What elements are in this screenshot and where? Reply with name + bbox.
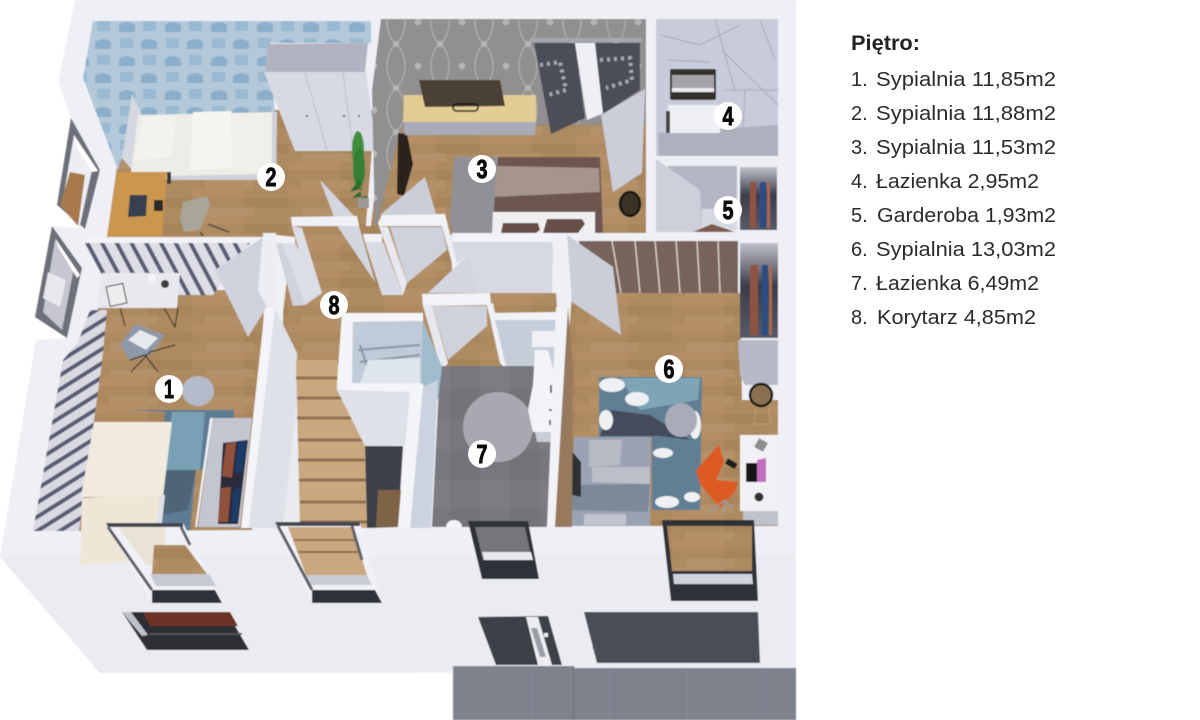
shower base — [360, 358, 420, 383]
room 2 wallpaper — [83, 21, 371, 170]
paved ground — [453, 666, 796, 720]
divider wall — [547, 307, 568, 527]
door leaf C — [390, 227, 447, 283]
stair flight — [296, 360, 367, 528]
badge 5 — [714, 195, 742, 225]
legend item 6: Sypialnia 13,03m2 — [876, 239, 1056, 261]
room 4: bathroom — [656, 19, 778, 156]
frame E top — [422, 293, 491, 306]
jamb C left — [379, 226, 407, 295]
towel radiator — [446, 520, 462, 527]
legend item 7: Łazienka 6,49m2 — [876, 273, 1039, 295]
shelf — [702, 209, 737, 230]
desk — [740, 435, 778, 525]
legend — [851, 32, 1056, 329]
plan drawing — [0, 0, 796, 720]
badge 4: 4 — [722, 101, 734, 131]
legend item 1: Sypialnia 11,85m2 — [876, 69, 1056, 91]
bathroom floor — [658, 125, 778, 156]
room 1 back wall stripes — [84, 243, 250, 295]
room 3 wallpaper — [372, 19, 646, 232]
rug — [130, 410, 234, 535]
chair — [180, 196, 229, 236]
shower front wall top — [337, 383, 423, 392]
rug — [449, 157, 500, 233]
left pillar — [258, 233, 276, 309]
badge 2: 2 — [266, 162, 276, 192]
legend item 3: 3. — [851, 137, 868, 159]
stairs and hall wall — [241, 308, 403, 528]
front door — [478, 616, 562, 665]
rug — [599, 377, 702, 510]
shower glass — [421, 321, 442, 400]
wall D face — [452, 242, 553, 293]
jamb E right — [487, 303, 507, 370]
front window 3 — [468, 521, 539, 579]
legend item 1: 1. — [851, 69, 868, 91]
badge 8: 8 — [328, 290, 340, 320]
door — [601, 89, 645, 192]
badge 1 — [155, 374, 183, 404]
shower top frame — [337, 313, 423, 383]
badge 5: 5 — [722, 195, 734, 225]
room 6 wall side — [555, 307, 573, 527]
closet rack — [740, 243, 778, 338]
wall panels — [612, 241, 720, 293]
shower marble interior — [352, 321, 423, 383]
room 1 floor — [72, 290, 265, 531]
TV stand — [403, 95, 536, 135]
room 5: wardrobe room — [656, 158, 778, 233]
door — [567, 235, 621, 335]
legend item 2: Sypialnia 11,88m2 — [876, 103, 1056, 125]
bed — [568, 437, 651, 526]
room 6 back wall — [578, 241, 738, 293]
left jamb inner — [282, 243, 322, 305]
left door leaf — [215, 237, 267, 337]
landing wood — [376, 490, 401, 527]
badge 1: 1 — [164, 374, 174, 404]
wall B face — [365, 242, 403, 295]
badge 6: 6 — [664, 354, 674, 384]
room 1 side window — [35, 226, 82, 338]
marble wall — [656, 19, 778, 156]
building silhouette — [0, 0, 796, 720]
marble side wall — [410, 380, 438, 528]
back wall — [668, 166, 737, 230]
wall B top — [363, 234, 382, 242]
legend item 5: Garderoba 1,93m2 — [877, 205, 1056, 227]
door frame A jamb — [292, 226, 322, 295]
dark side furniture — [397, 133, 413, 196]
legend item 2: 2. — [851, 103, 868, 125]
threshold wood — [493, 293, 557, 312]
frame C top — [378, 214, 448, 226]
bed — [80, 422, 172, 565]
door leaf E lower — [432, 306, 487, 360]
legend item 8: Korytarz 4,85m2 — [877, 307, 1036, 329]
badge 4 — [714, 101, 742, 131]
legend item 4: 4. — [851, 171, 868, 193]
front window 2 — [275, 522, 382, 603]
badge 3: 3 — [476, 154, 488, 184]
badge 3 — [468, 154, 496, 184]
3D floor plan — [0, 0, 796, 720]
room 1 left wall stripes — [33, 310, 107, 531]
legend heading: Piętro: — [851, 32, 920, 55]
niche wall top — [493, 312, 558, 320]
legend item 4: Łazienka 2,95m2 — [876, 171, 1039, 193]
room 8: corridor — [215, 180, 568, 372]
bed — [122, 94, 277, 180]
legend item 5: 5. — [851, 205, 868, 227]
wardrobe — [264, 43, 377, 151]
door leaf E — [428, 255, 478, 293]
legend item 8: 8. — [851, 307, 868, 329]
hall wall face — [249, 308, 297, 528]
badge 6 — [655, 354, 683, 384]
pouf — [182, 376, 214, 406]
corridor floor — [283, 226, 557, 372]
badge 8 — [320, 290, 348, 320]
patterned chair — [120, 324, 175, 372]
room 6: bedroom — [555, 235, 778, 526]
front window 4 — [662, 520, 758, 601]
jamb E left — [423, 306, 448, 372]
desk with laptop — [107, 172, 171, 236]
vanity — [666, 69, 720, 133]
vanity — [528, 350, 556, 442]
door leaf — [380, 177, 436, 215]
plant — [350, 131, 369, 210]
marble details — [358, 345, 420, 375]
wall D top — [450, 233, 555, 242]
legend item 7: 7. — [851, 273, 868, 295]
jamb C right — [442, 226, 457, 263]
room 1: bedroom — [33, 243, 265, 565]
door leaf A — [320, 180, 375, 282]
inner wall — [283, 400, 300, 528]
double bed — [492, 157, 603, 233]
hanger — [693, 224, 735, 232]
bathroom floor — [432, 366, 552, 527]
room 2 floor — [107, 110, 375, 237]
closet rack — [740, 167, 777, 230]
space below stairs — [365, 446, 403, 528]
door frame A top — [291, 216, 359, 226]
room 3 floor — [370, 120, 646, 233]
left jamb outer — [276, 243, 305, 306]
lamp — [620, 192, 640, 216]
left jamb top — [276, 235, 295, 243]
lamp — [750, 384, 772, 424]
room 6 floor — [555, 293, 778, 526]
stair treads — [296, 378, 367, 522]
legend item 3: Sypialnia 11,53m2 — [876, 137, 1056, 159]
front wall face — [0, 555, 796, 673]
legend item 6: 6. — [851, 239, 868, 261]
television — [419, 80, 505, 111]
room 2: bedroom — [83, 21, 377, 237]
hall wall top — [241, 308, 275, 528]
ground floor window — [122, 612, 249, 650]
room 2 side window — [57, 118, 100, 229]
orange chair — [696, 445, 738, 514]
divider pillar — [552, 233, 568, 307]
bathroom niche — [495, 320, 558, 370]
round rug — [463, 392, 533, 462]
badge 2 — [257, 162, 285, 192]
shower box — [337, 313, 442, 528]
closet — [195, 418, 252, 527]
marble veins — [660, 19, 778, 156]
garage door — [584, 612, 760, 663]
pouf — [665, 403, 697, 437]
niche basin — [532, 331, 557, 347]
shower front wall face — [337, 390, 410, 446]
room 3: bedroom — [370, 19, 646, 233]
room number badges — [155, 101, 742, 469]
wall top above room 1 — [83, 238, 263, 243]
badge 7 — [468, 439, 496, 469]
door — [656, 159, 702, 232]
curtains — [530, 38, 642, 134]
console table — [96, 273, 180, 327]
room 7: bathroom — [432, 307, 573, 527]
closet base — [738, 340, 778, 385]
white wall — [398, 384, 423, 528]
badge 7: 7 — [476, 439, 488, 469]
front window 1 — [106, 523, 222, 603]
